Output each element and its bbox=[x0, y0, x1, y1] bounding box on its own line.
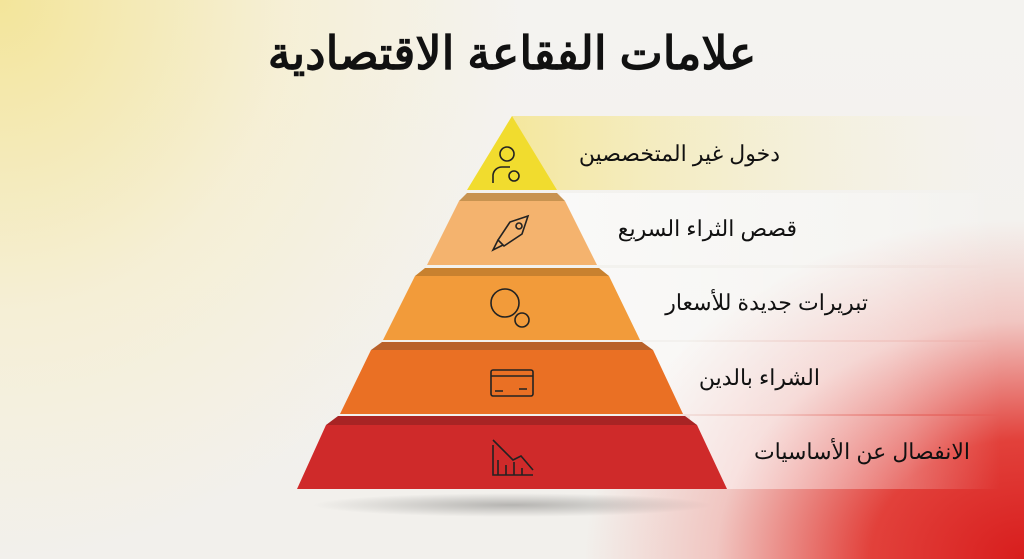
icon: bubble bbox=[491, 289, 529, 327]
label 1: دخول غير المتخصصين bbox=[579, 141, 780, 166]
tier 1 bbox=[467, 116, 557, 190]
icon: credit card bbox=[491, 370, 533, 396]
tier 4 bbox=[340, 342, 683, 414]
label 3: تبريرات جديدة للأسعار bbox=[665, 290, 868, 315]
label 2: قصص الثراء السريع bbox=[618, 216, 797, 241]
tier 5 bbox=[297, 416, 727, 489]
label 5: الانفصال عن الأساسيات bbox=[754, 439, 970, 464]
label 4: الشراء بالدين bbox=[699, 365, 820, 390]
icon: rocket bbox=[493, 216, 528, 250]
text bands bbox=[512, 116, 1002, 489]
tier 2 bbox=[427, 193, 597, 265]
title: علامات الفقاعة الاقتصادية bbox=[268, 27, 756, 79]
icon: falling chart bbox=[493, 440, 533, 475]
tier 3 bbox=[383, 268, 640, 340]
icon: investor bbox=[493, 147, 519, 183]
